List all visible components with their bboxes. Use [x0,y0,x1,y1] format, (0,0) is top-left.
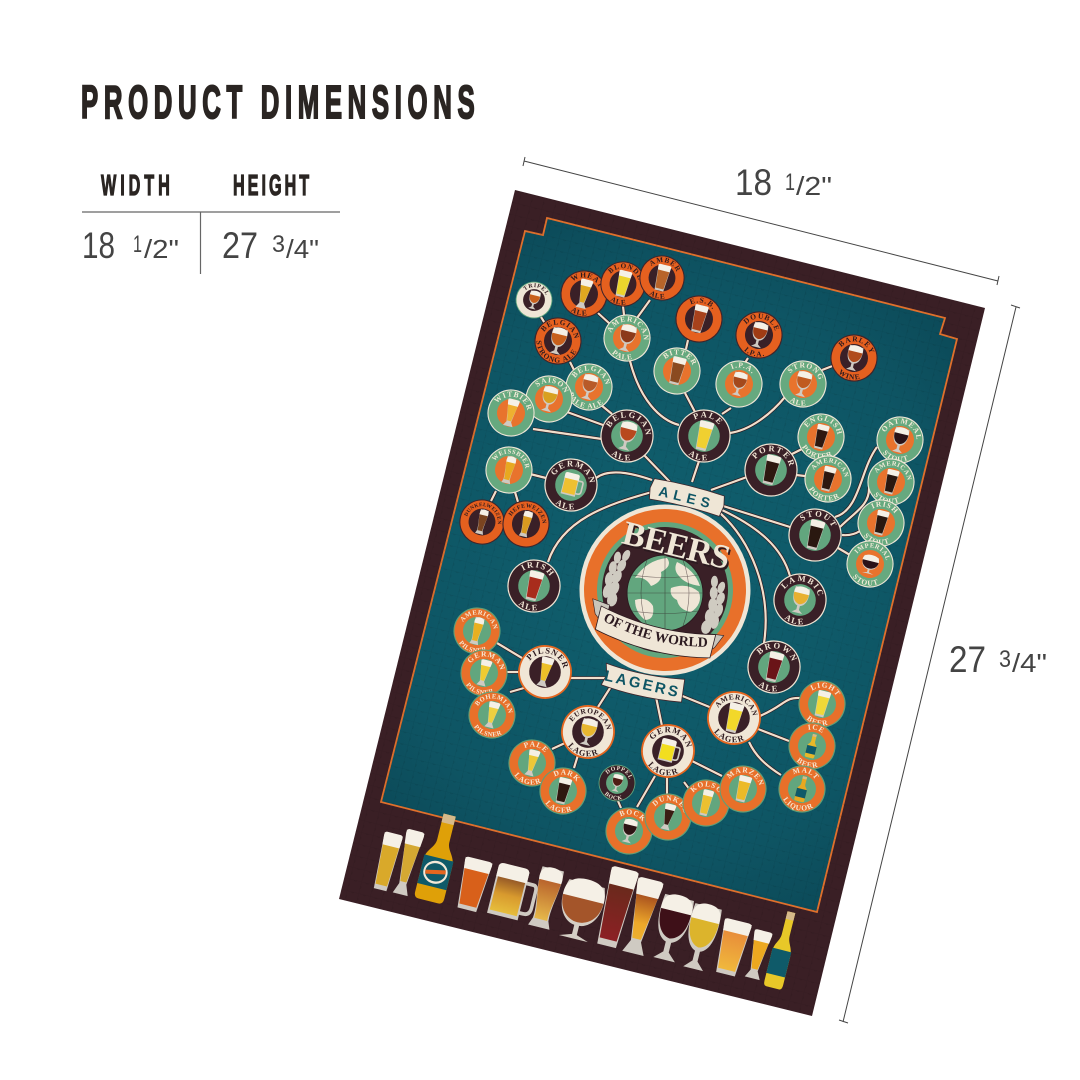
badge: bitter [653,347,701,395]
badge: belgian pale ale: PALE ALE [572,392,603,409]
badge: barley wine: BARLEY [838,336,874,352]
badge: american lager: AMERICAN [712,687,764,719]
badge: amber ale [639,255,685,301]
heading: beers: BEERS [619,515,733,577]
badge: dark lager [535,762,591,819]
badge: european lager: EUROPEAN [566,701,618,733]
badge: bohemian pilsner [468,691,516,739]
badge: esb [675,295,723,343]
badge: witbier: WITBIER [494,392,532,410]
badge: kolsch [678,774,734,831]
badge: american lager [702,686,766,750]
badge: blonde ale: BLONDE [608,263,640,280]
badge: dunkel: DUNKEL [649,789,694,816]
badge: weissbier: WEISSBIER [490,444,534,471]
badge: double ipa: I.P.A. [744,346,764,357]
badge: german pilsner: GERMAN [464,645,511,673]
badge: irish stout [857,499,905,546]
central emblem: beers of the world [580,504,750,676]
badge: german pilsner: PILSNER [463,681,497,700]
badge: german ale [544,458,598,512]
badge: saison [526,375,573,423]
badge: german lager: LAGER [645,758,682,781]
height dimension label: 3 [999,646,1011,673]
badge: pilsner: PILSNER [523,640,575,672]
badge: weissbier [485,446,533,494]
badge: dunkelweizen [459,499,504,545]
badge: irish ale: IRISH [517,555,559,580]
badge: american porter: AMERICAN [812,458,849,477]
badge: lambic ale: ALE [782,611,808,628]
badge: ipa [715,360,763,408]
height value: /4" [286,234,319,264]
badge: american pilsner: PILSNER [456,639,490,658]
badge: belgian pale ale [566,363,613,411]
badge: belgian ale: BELGIAN [606,412,652,434]
column heading: width: WIDTH [101,169,170,201]
badge: german lager: GERMAN [646,719,698,751]
icon: amber pilsner [620,876,664,957]
badge: double ipa: DOUBLE [743,313,780,330]
badge: porter [744,443,798,497]
width value: 18 [82,225,115,266]
badge: american pilsner [453,607,501,654]
badge: american stout [867,458,915,505]
icon: amber pint [453,856,493,913]
width dimension label [735,162,832,203]
badge: strong ale: STRONG [788,362,824,380]
height value [222,225,319,266]
badge: english porter: PORTER [802,444,832,458]
icon: golden goblet [679,901,723,972]
badge: malt liquor: LIQUOR [779,794,817,816]
badge: belgian ale: ALE [611,451,630,460]
badge: wheat ale: ALE [570,308,586,316]
height dimension arrow [839,305,1020,1023]
badge: amber ale: ALE [649,291,664,299]
badge: belgian pale ale: BELGIAN [571,366,610,384]
badge: saison: SAISON [535,378,569,392]
banner: ales [647,477,727,517]
badge: belgian ale [600,409,654,463]
width dimension label: /2" [796,171,832,201]
badge: brown ale: BROWN [753,635,803,666]
ribbon: of the world [592,598,724,658]
height value: 3 [272,231,285,258]
badge: hefeweizen: HEFEWEIZEN [507,499,550,526]
badge: american lager: LAGER [711,725,748,748]
badge: light beer: BEER [804,713,831,730]
badge: porter: PORTER [752,446,794,466]
badge: strong ale [779,360,827,408]
badge: english porter: ENGLISH [804,416,842,434]
badge: barley wine [830,334,878,382]
badge: stout [788,508,842,562]
badge: tripel [516,282,552,318]
icon: malt liquor bottle [414,811,464,905]
badge: american stout: AMERICAN [874,461,912,480]
badge: wheat ale: WHEAT [570,272,600,287]
width value: /2" [144,234,179,264]
icon: small weizen [743,929,773,980]
badge: european lager [561,705,615,759]
badge: pale lager: PALE [521,736,552,756]
badge: light beer: LIGHT [807,677,845,699]
badge: irish stout: STOUT [864,533,888,544]
badge: kolsch: KOLSCH [687,775,732,802]
badge: american pale: PALE [612,350,632,360]
badge: wheat ale [560,270,607,318]
badge: lambic ale: LAMBIC [777,568,830,600]
badge: doppel bock: BOCK [602,791,625,804]
badge: malt liquor [774,760,830,818]
badge: irish stout: IRISH [870,502,898,514]
badge: witbier [487,389,535,437]
badge: dunkelweizen: DUNKELWEIZEN [463,498,506,526]
badge: pale ale: ALE [688,451,707,460]
badge: tripel: TRIPEL [522,283,549,295]
badge: american porter [804,455,852,503]
icon: weizen glass [527,865,565,930]
badge: stout: STOUT [796,504,843,532]
badge: amber ale: AMBER [650,257,680,272]
badge: esb: E.S.B. [689,298,713,309]
branch connectors [491,300,877,808]
icon: snifter [553,874,608,944]
badge: brown ale [747,640,801,694]
badge: pale ale: PALE [692,412,722,424]
badge: imperial stout [846,540,894,588]
badge: ice beer [784,717,840,775]
badge: german ale: ALE [553,496,579,513]
icon: pilsner glass [391,828,425,896]
badge: double ipa [735,311,783,359]
heading: beers: BEERS [620,517,735,579]
badge: irish ale: ALE [516,597,542,614]
badge: dark lager: DARK [550,764,584,785]
banner: lagers: LAGERS [603,667,682,701]
ribbon: of the world: OF THE WORLD [604,614,708,647]
badge: ipa: I.P.A. [730,362,752,374]
icon: pint of pale beer [371,831,403,892]
icon: beer mug [487,862,540,923]
badge: german ale: GERMAN [547,452,602,487]
panel: jigsaw puzzle poster [339,190,985,1016]
badge: american pale: AMERICAN [608,316,648,340]
width dimension label: 1 [785,169,795,196]
width dimension label: 18 [735,162,772,203]
title: PRODUCT DIMENSIONS [81,76,475,128]
badge: belgian strong ale: BELGIAN [540,320,580,338]
badge: brown ale: ALE [756,678,782,695]
badge: pale ale [677,409,731,463]
badge: english porter [797,413,845,460]
badge: marzen: MARZEN [724,761,770,789]
badge: oatmeal stout: STOUT [882,450,908,461]
badge: strong ale: ALE [790,398,806,406]
badge: doppel bock: DOPPEL [604,763,635,782]
badge: ice beer: ICE [805,721,827,736]
badge: doppel bock [595,761,639,806]
icon: globe [627,555,703,631]
badge: pilsner [518,645,572,699]
badge: oatmeal stout: OATMEAL [882,418,922,440]
badge: bohemian pilsner: PILSNER [471,723,505,742]
badge: bitter: BITTER [662,350,696,366]
badge: hefeweizen [502,500,550,548]
badge: lambic ale [773,573,827,627]
badge: light beer [794,675,850,733]
badge: imperial stout: STOUT [850,571,882,591]
badge: belgian strong ale [534,317,582,365]
badge: ice beer: BEER [794,755,821,772]
badge: irish ale [507,559,561,613]
height dimension label: 27 [949,639,986,680]
badge: belgian strong ale: STRONG ALE [536,340,576,363]
badge: american porter: PORTER [808,486,840,501]
badge: pale lager [504,734,560,791]
height value: 27 [222,225,258,266]
badge: german lager [636,718,700,783]
badge: american pilsner: AMERICAN [458,605,502,632]
height dimension label [949,639,1047,680]
badge: pale lager: LAGER [511,769,545,790]
badge: bock [601,802,657,859]
badge: barley wine: WINE [840,369,860,380]
icon: tall red pint [593,866,639,949]
badge: bock: BOCK [616,804,650,825]
width value [82,225,179,266]
poster border [339,190,985,1016]
badge: blonde ale [600,261,644,307]
badge: bohemian pilsner: BOHEMIAN [473,689,517,716]
column heading: height: HEIGHT [233,169,310,201]
banner: ales: ALES [657,483,717,512]
badge: european lager: LAGER [565,739,602,762]
badge: marzen [715,760,771,817]
badge: oatmeal stout [876,416,924,463]
icon: long neck bottle [763,910,801,990]
width value: 1 [133,231,142,258]
glass row along poster bottom [371,811,801,990]
poster teal field with orange frame [381,218,957,912]
badge: american pale [603,314,651,362]
badge: malt liquor: MALT [790,762,823,783]
badge: blonde ale: ALE [610,297,626,305]
icon: wheat and hops [597,545,732,637]
icon: orange pint [712,918,752,978]
badge: american stout: STOUT [874,492,898,503]
dimensions table [82,169,340,274]
icon: dark tulip [649,891,696,964]
badge: dunkel [640,788,696,845]
badge: dark lager: LAGER [542,797,576,818]
badge: imperial stout: IMPERIAL [852,538,894,563]
badge: german pilsner [460,649,508,696]
width dimension arrow [523,157,999,285]
height dimension label: /4" [1012,648,1047,678]
